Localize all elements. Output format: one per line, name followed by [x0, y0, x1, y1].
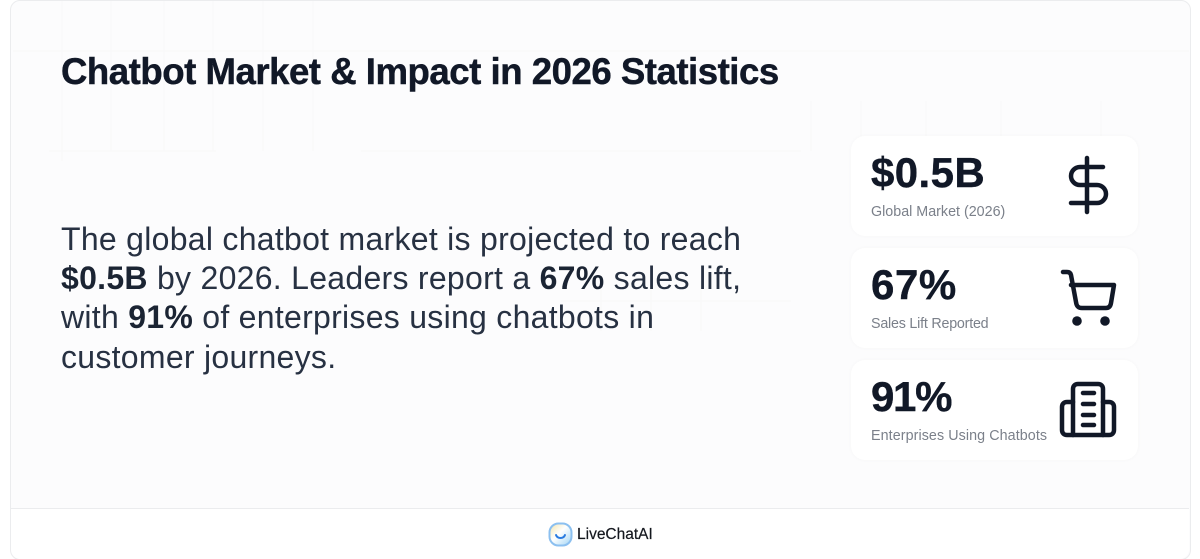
description paragraph: $0.5B by 2026. Leaders report a 67% sales lift, — [61, 260, 741, 296]
stat card: global market — [851, 136, 1138, 236]
icon: shopping cart — [1060, 270, 1116, 326]
stat label: Enterprises Using Chatbots — [871, 428, 1047, 444]
description paragraph: The global chatbot market is projected to reach — [61, 221, 741, 257]
stat value: $0.5B — [871, 149, 985, 196]
title: Chatbot Market & Impact in 2026 Statistics — [61, 51, 779, 92]
stat value: 91% — [871, 373, 951, 420]
brand name: LiveChatAI — [577, 526, 653, 543]
description paragraph: customer journeys. — [61, 339, 336, 375]
icon: dollar sign — [1068, 156, 1108, 214]
description paragraph — [61, 221, 741, 375]
stat label: Global Market (2026) — [871, 204, 1005, 220]
stat card: sales lift — [851, 248, 1138, 348]
footer — [11, 508, 1189, 559]
icon: office building — [1060, 382, 1116, 438]
stat value: 67% — [871, 261, 957, 308]
description paragraph: with 91% of enterprises using chatbots in — [61, 299, 654, 335]
logo: LiveChatAI — [548, 522, 653, 546]
stat label: Sales Lift Reported — [871, 316, 988, 332]
icon: smiley logo — [548, 522, 572, 546]
stat card: enterprises — [851, 360, 1138, 460]
